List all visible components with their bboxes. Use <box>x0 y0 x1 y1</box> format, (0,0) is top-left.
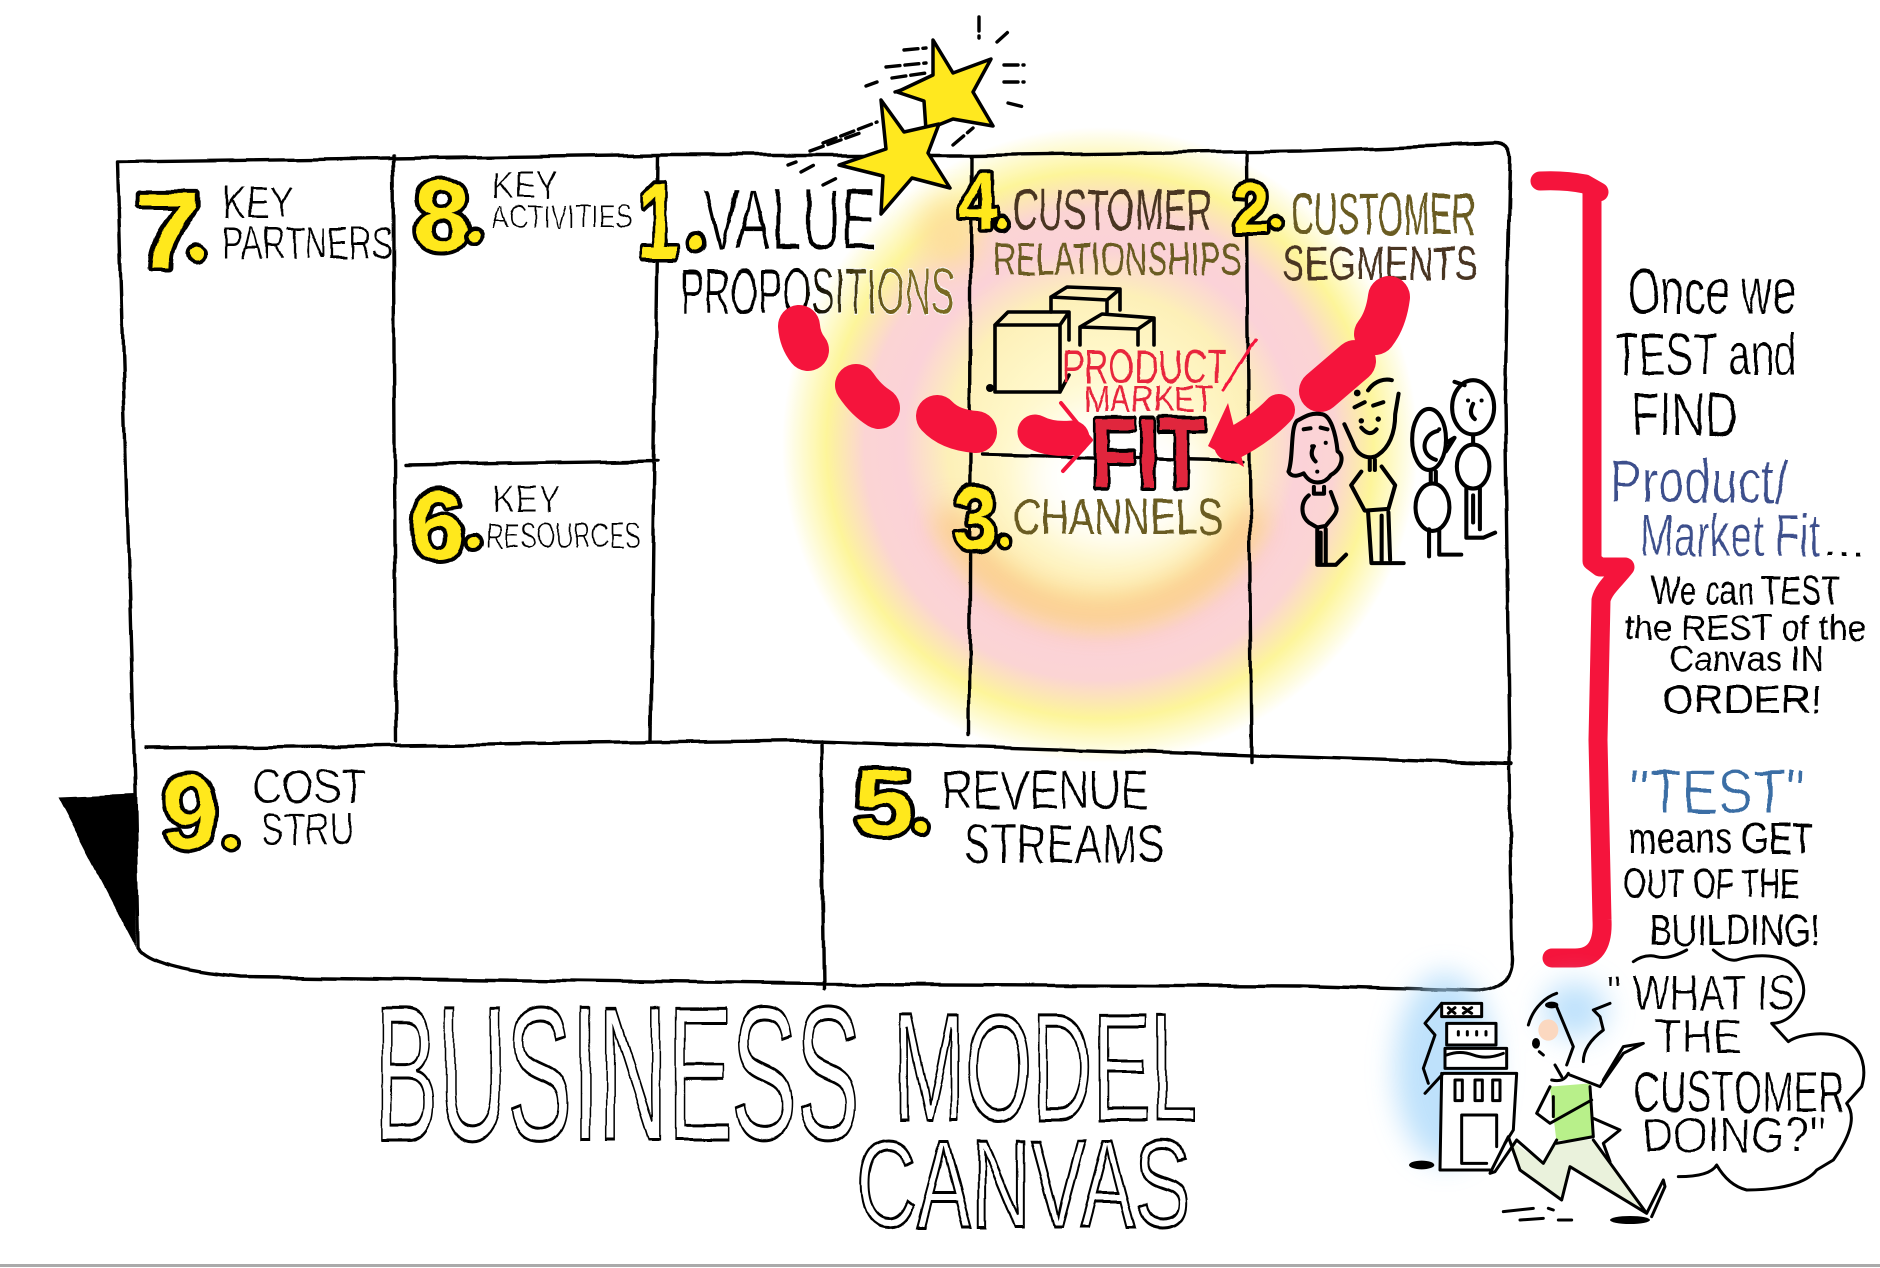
box: 2 customer segments: SEGMENTS <box>1282 238 1478 291</box>
runner and building illustration <box>1409 950 1864 1224</box>
speech cloud quote: DOING?" <box>1642 1107 1825 1163</box>
box: 9 cost structure <box>162 754 366 872</box>
box: 9 cost structure: STRU <box>261 803 354 855</box>
building <box>1409 1003 1517 1170</box>
side note: test means get out: BUILDING! <box>1650 906 1820 955</box>
title: business model canvas <box>374 966 1198 1254</box>
box: 5 revenue streams <box>854 750 1165 875</box>
side note: test means get out <box>1623 758 1820 955</box>
product/market fit label <box>1062 339 1256 510</box>
box: 3 channels: 3 <box>953 469 997 568</box>
side note: test means get out: "TEST" <box>1630 758 1805 827</box>
side note: test and find: the REST of the <box>1625 607 1866 648</box>
box: 8 key activities: KEY <box>492 165 558 207</box>
product/market fit label: FIT <box>1091 398 1205 510</box>
person four <box>1452 380 1495 538</box>
box: 7 key partners: 7 <box>135 170 201 291</box>
box: 2 customer segments <box>1233 169 1478 291</box>
side note: test means get out: OUT OF THE <box>1623 860 1800 907</box>
icon: shooting stars <box>788 17 1024 214</box>
glow behind product/market fit <box>782 127 1418 763</box>
box: 7 key partners: KEY <box>222 176 294 228</box>
box: 6 key resources: KEY <box>492 479 561 521</box>
red dashed arrows pointing at fit <box>799 297 1389 471</box>
side note: test and find: ... <box>1824 521 1864 565</box>
box: 4 customer relationships: CUSTOMER <box>1013 178 1212 243</box>
speech cloud quote: THE <box>1655 1011 1742 1064</box>
box: 2 customer segments: CUSTOMER <box>1291 181 1475 248</box>
runner <box>1490 993 1665 1224</box>
side note: test and find: Product/ <box>1610 448 1789 517</box>
box: 5 revenue streams: 5 <box>854 750 914 855</box>
side note: test and find: FIND <box>1631 381 1738 450</box>
box: 2 customer segments: 2 <box>1233 169 1269 247</box>
box: 1 value propositions: PROPOSITIONS <box>680 254 955 328</box>
box: 4 customer relationships <box>959 156 1241 285</box>
box: 8 key activities: ACTIVITIES <box>492 198 633 235</box>
box: 6 key resources <box>410 470 641 580</box>
person three <box>1412 409 1461 556</box>
outer frame <box>118 144 1513 991</box>
person two <box>1344 380 1404 563</box>
box: 5 revenue streams: STREAMS <box>963 812 1165 875</box>
speech cloud quote <box>1607 965 1845 1163</box>
icon: product boxes <box>986 287 1154 392</box>
blue glow behind building and head <box>1395 973 1607 1163</box>
side note: test and find: Canvas IN <box>1670 638 1824 679</box>
column and row dividers <box>146 153 1512 989</box>
box: 4 customer relationships: RELATIONSHIPS <box>993 233 1241 285</box>
box: 9 cost structure: COST <box>252 761 366 814</box>
product/market fit label: MARKET <box>1084 378 1214 419</box>
canvas grid frame <box>58 144 1513 991</box>
box: 1 value propositions: 1 <box>638 160 678 281</box>
side note: test and find: TEST and <box>1614 321 1796 388</box>
black corner wedge <box>58 794 136 947</box>
title: business model canvas: MODEL <box>894 983 1198 1153</box>
product/market fit label: PRODUCT <box>1062 340 1227 393</box>
red bracket <box>1540 181 1625 958</box>
box: 3 channels <box>953 469 1223 568</box>
side note: test and find: Once we <box>1627 254 1796 328</box>
side note: test and find <box>1610 254 1866 722</box>
box: 1 value propositions: VALUE <box>703 170 877 269</box>
box: 6 key resources: RESOURCES <box>486 515 641 556</box>
box: 1 value propositions <box>638 160 955 328</box>
customers group illustration <box>1288 380 1495 565</box>
side note: test means get out: means GET <box>1628 814 1813 863</box>
bottom rule <box>0 1264 1880 1267</box>
box: 4 customer relationships: 4 <box>959 156 997 245</box>
side note: test and find: ORDER! <box>1662 678 1822 722</box>
box: 8 key activities <box>414 160 633 272</box>
title: business model canvas: CANVAS <box>857 1116 1190 1254</box>
speech cloud quote: " WHAT IS <box>1607 965 1795 1021</box>
speech cloud <box>1583 950 1864 1190</box>
box: 5 revenue streams: REVENUE <box>941 758 1149 821</box>
box: 7 key partners: PARTNERS <box>222 217 393 269</box>
title: business model canvas: BUSINESS <box>374 966 860 1181</box>
box: 9 cost structure: 9 <box>162 754 218 872</box>
box: 7 key partners <box>135 170 393 291</box>
box: 3 channels: CHANNELS <box>1013 489 1223 545</box>
box: 8 key activities: 8 <box>414 160 470 272</box>
person one <box>1288 414 1346 565</box>
box: 6 key resources: 6 <box>410 470 465 580</box>
